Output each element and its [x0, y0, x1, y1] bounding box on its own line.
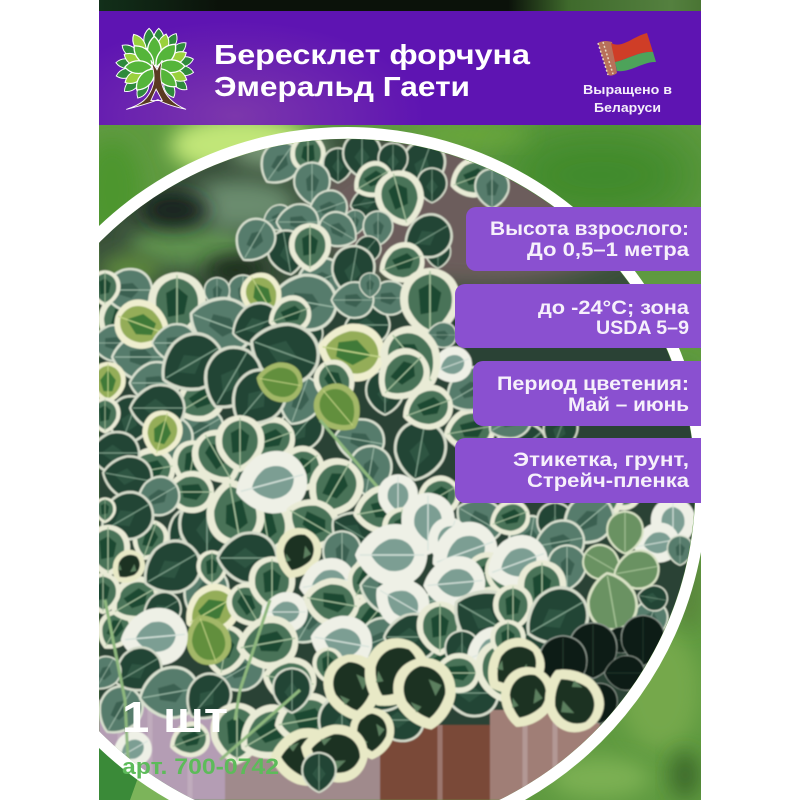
title: Бересклет форчуна — [214, 39, 530, 70]
lower-left leaf cluster — [99, 409, 399, 794]
title: Эмеральд Гаети — [214, 71, 470, 102]
title — [214, 39, 530, 102]
photo: euonymus foliage in a round frame — [82, 130, 701, 800]
quantity label: 1 шт — [122, 693, 228, 742]
label: grown in Belarus — [583, 83, 672, 115]
info box: hardiness: до -24°C; зона — [538, 298, 689, 319]
info box: flowering period: Май – июнь — [568, 395, 689, 416]
info box: flowering period: Период цветения: — [497, 374, 689, 395]
label: grown in Belarus: Выращено в — [583, 83, 672, 97]
photo backdrop: blurred garden and wall — [99, 130, 701, 800]
info box: height: До 0,5–1 метра — [527, 240, 690, 261]
label: grown in Belarus: Беларуси — [594, 101, 661, 115]
info box: hardiness — [455, 284, 701, 348]
info box: package: Этикетка, грунт, — [513, 450, 689, 471]
infographic — [99, 0, 701, 800]
green blurred backdrop — [82, 0, 701, 800]
central bright leaf cluster — [276, 456, 504, 730]
info box: hardiness: USDA 5–9 — [596, 318, 689, 339]
white circular frame — [99, 127, 701, 800]
info box: flowering period — [473, 361, 701, 426]
upper leaf cluster — [234, 139, 511, 288]
middle leaf cluster — [89, 265, 477, 443]
info box: package — [455, 438, 701, 503]
right leaf cluster — [486, 503, 694, 734]
icon: Belarus flag — [598, 33, 656, 76]
header banner — [99, 11, 701, 125]
info box: height: Высота взрослого: — [490, 219, 689, 240]
logo: tree — [115, 28, 195, 109]
info box: package: Стрейч-пленка — [527, 471, 689, 492]
background leaf layer — [88, 251, 675, 764]
article number: арт. 700-0742 — [122, 754, 279, 779]
info box: height — [466, 207, 701, 271]
